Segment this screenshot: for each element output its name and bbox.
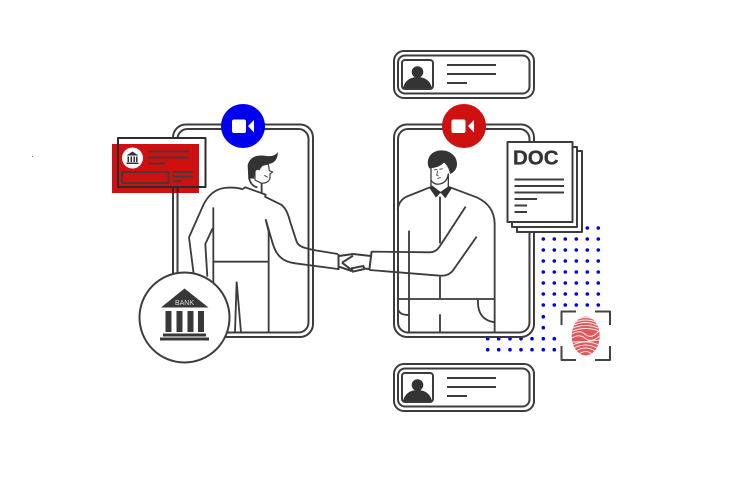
left head [248, 152, 278, 183]
right phone frame [394, 124, 534, 337]
document stack [508, 142, 582, 232]
bank badge: BANK [175, 300, 194, 307]
icon: bank building [160, 288, 209, 340]
dot grid [486, 226, 600, 352]
right person [369, 150, 495, 332]
icon: blue camera [232, 119, 254, 133]
stray dot [32, 156, 33, 157]
card bank logo [122, 148, 143, 168]
icon: avatar [403, 77, 432, 88]
bank card [112, 138, 206, 193]
handshake [338, 251, 372, 272]
fingerprint scanner [562, 312, 610, 360]
DOC heading: DOC [513, 146, 559, 170]
icon: red camera [452, 119, 474, 133]
left phone frame [173, 124, 313, 337]
right head [428, 150, 457, 198]
bank badge [140, 272, 230, 362]
red video badge [442, 104, 486, 148]
blue video badge [221, 104, 265, 148]
left person [189, 152, 338, 333]
icon: avatar [403, 390, 432, 401]
icon: fingerprint [572, 316, 600, 356]
bottom ID card [394, 364, 534, 411]
top ID card [394, 51, 534, 98]
